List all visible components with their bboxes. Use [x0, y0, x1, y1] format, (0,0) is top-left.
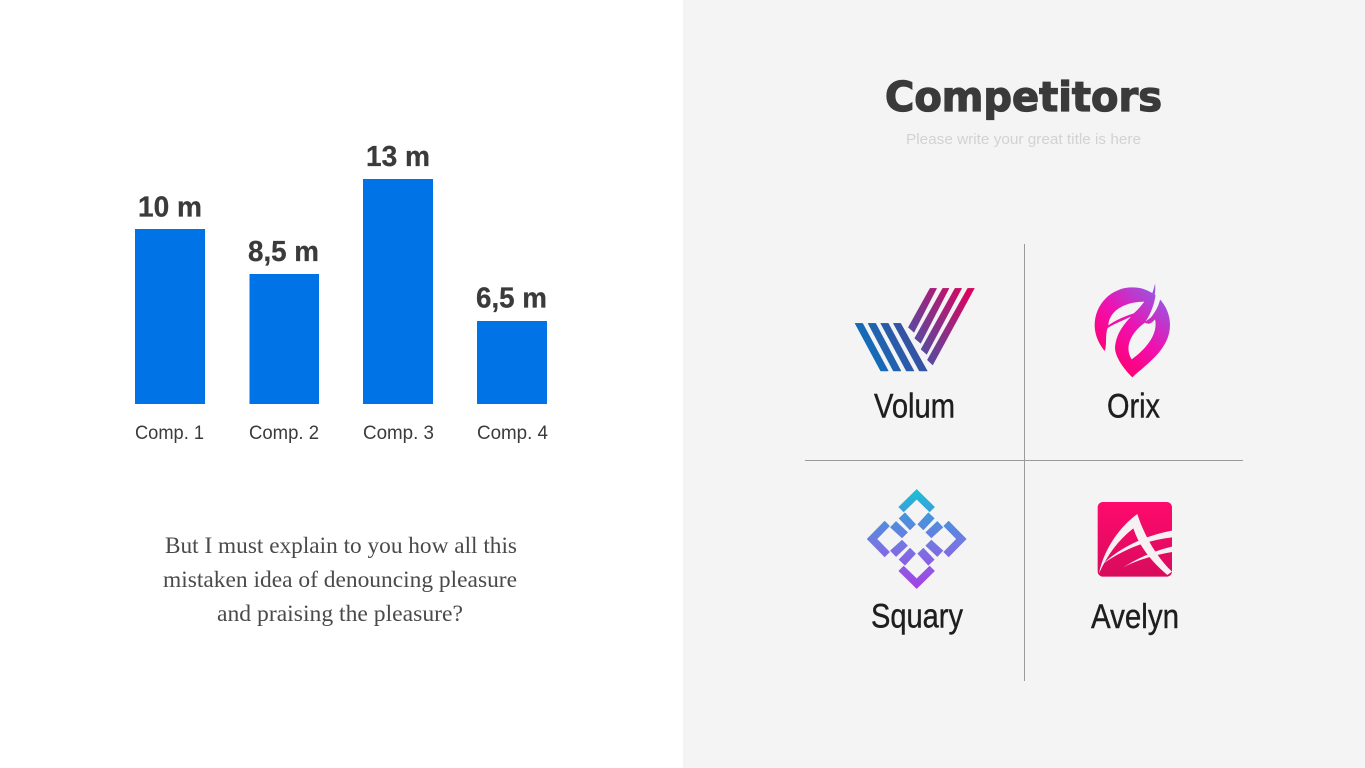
title: Competitors — [885, 73, 1162, 121]
competitor: Orix — [1095, 283, 1170, 426]
icon: Volum logo — [855, 288, 974, 371]
paragraph text: and praising the pleasure? — [217, 601, 463, 626]
competitor: Squary — [867, 489, 966, 636]
bar chart — [135, 141, 548, 444]
paragraph text — [163, 533, 517, 626]
subtitle: Please write your great title is here — [906, 131, 1141, 148]
grid divider: vertical — [1024, 244, 1025, 681]
label: Avelyn: Avelyn — [1091, 598, 1179, 636]
bar: Comp. 4 — [476, 282, 548, 444]
label: Orix: Orix — [1107, 388, 1160, 426]
right panel background — [683, 0, 1365, 768]
paragraph text: But I must explain to you how all this — [165, 533, 517, 558]
icon: Avelyn logo — [1098, 502, 1172, 577]
competitor: Volum — [855, 288, 974, 426]
bar: Comp. 2 — [248, 236, 319, 444]
bar: Comp. 1 — [135, 192, 205, 444]
bar: Comp. 1: 10 m — [138, 192, 202, 224]
bar: Comp. 4: 6,5 m — [476, 282, 547, 314]
icon: Orix logo — [1095, 283, 1170, 377]
bar: Comp. 3 — [363, 141, 434, 444]
icon: Squary logo — [867, 489, 966, 589]
label: Volum: Volum — [874, 388, 955, 426]
bar: Comp. 4: Comp. 4 — [477, 422, 548, 444]
bar: Comp. 3: Comp. 3 — [363, 422, 434, 444]
bar: Comp. 3: 13 m — [366, 141, 430, 173]
competitor: Avelyn — [1091, 502, 1179, 636]
label: Squary: Squary — [871, 598, 963, 636]
bar: Comp. 2: 8,5 m — [248, 236, 319, 268]
paragraph text: mistaken idea of denouncing pleasure — [163, 567, 517, 592]
grid divider: horizontal — [805, 460, 1243, 461]
bar: Comp. 2: Comp. 2 — [249, 422, 319, 444]
bar: Comp. 1: Comp. 1 — [135, 422, 204, 444]
